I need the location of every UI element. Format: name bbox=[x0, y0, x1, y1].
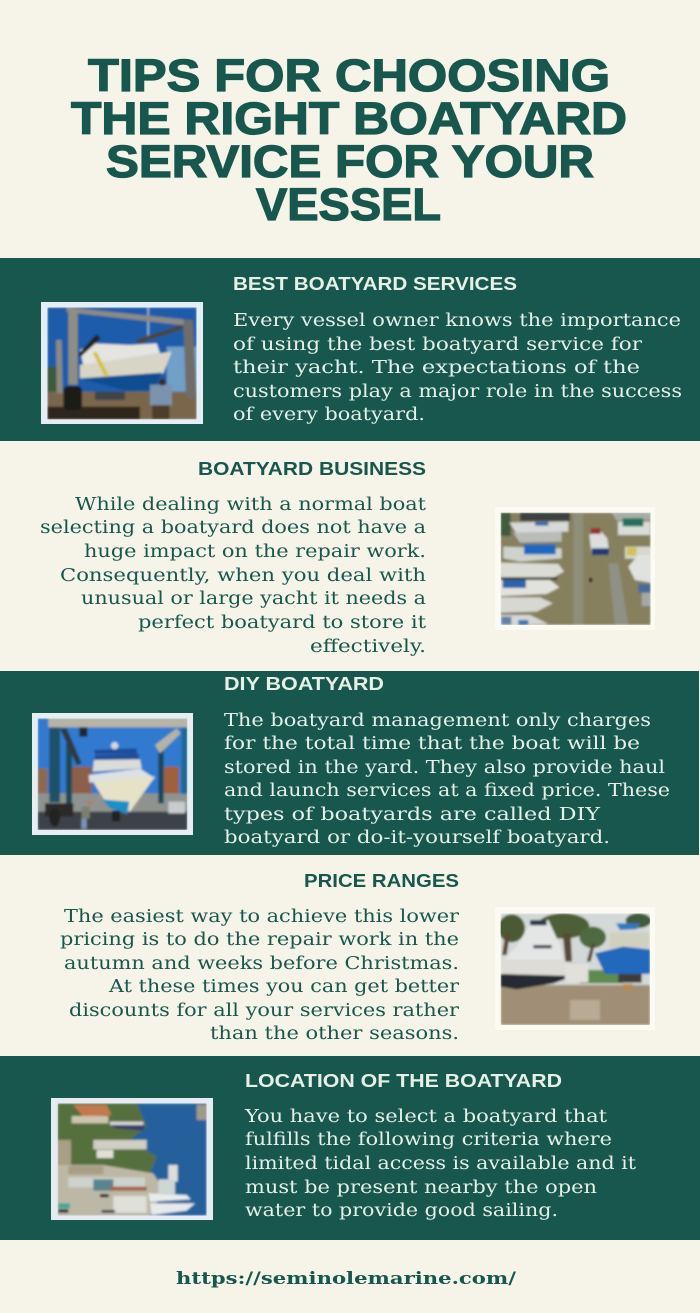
text block: The easiest way to achieve this lower bbox=[64, 907, 460, 927]
panel: DIY boatyard bbox=[0, 671, 699, 855]
text block: You have to select a boatyard that bbox=[244, 1107, 607, 1127]
panel: price ranges bbox=[60, 871, 655, 1044]
photo: boats on stands under palms bbox=[495, 907, 655, 1030]
text block: At these times you can get better bbox=[108, 977, 460, 997]
text block: Every vessel owner knows the importance bbox=[233, 311, 681, 331]
text block: boatyard or do-it-yourself boatyard. bbox=[224, 828, 610, 848]
text block: customers play a major role in the success bbox=[233, 382, 682, 402]
text block: stored in the yard. They also provide haul bbox=[224, 758, 665, 778]
text block: of using the best boatyard service for bbox=[233, 335, 643, 355]
text block: Consequently, when you deal with bbox=[60, 566, 426, 586]
heading: BOATYARD BUSINESS bbox=[198, 459, 426, 479]
text block: and launch services at a fixed price. These bbox=[224, 781, 670, 801]
title: VESSEL bbox=[256, 179, 441, 230]
text block bbox=[244, 1107, 636, 1221]
photo: boats parked in yard from above bbox=[495, 507, 655, 630]
text block: pricing is to do the repair work in the bbox=[60, 930, 459, 950]
text block: discounts for all your services rather bbox=[69, 1001, 460, 1021]
photo: motor yacht in travel lift bbox=[32, 713, 193, 835]
footer url: https://seminolemarine.com/ bbox=[176, 1269, 517, 1289]
title: THE RIGHT BOATYARD bbox=[71, 93, 627, 144]
heading: LOCATION OF THE BOATYARD bbox=[245, 1071, 562, 1091]
text block: must be present nearby the open bbox=[245, 1178, 597, 1198]
title: SERVICE FOR YOUR bbox=[106, 136, 594, 187]
photo: boat in travel lift bbox=[41, 302, 203, 424]
heading: PRICE RANGES bbox=[304, 871, 459, 891]
text block bbox=[60, 907, 460, 1044]
text block: types of boatyards are called DIY bbox=[224, 805, 601, 825]
text block: autumn and weeks before Christmas. bbox=[64, 954, 459, 974]
text block: fulfills the following criteria where bbox=[245, 1130, 612, 1150]
photo: aerial view of marina bbox=[51, 1098, 213, 1220]
heading: BEST BOATYARD SERVICES bbox=[233, 274, 517, 294]
text block: While dealing with a normal boat bbox=[75, 495, 426, 515]
text block bbox=[233, 311, 682, 425]
panel: best boatyard services bbox=[0, 258, 700, 441]
heading: DIY BOATYARD bbox=[224, 674, 384, 694]
text block: than the other seasons. bbox=[210, 1024, 459, 1044]
text block: for the total time that the boat will be bbox=[224, 734, 640, 754]
panel: boatyard business bbox=[40, 459, 655, 657]
text block: selecting a boatyard does not have a bbox=[40, 518, 426, 538]
text block: their yacht. The expectations of the bbox=[233, 358, 640, 378]
text block: perfect boatyard to store it bbox=[138, 613, 426, 633]
title: TIPS FOR CHOOSING bbox=[88, 50, 610, 101]
text block: effectively. bbox=[310, 637, 426, 657]
text block bbox=[40, 495, 426, 657]
text block bbox=[224, 711, 670, 848]
text block: The boatyard management only charges bbox=[224, 711, 651, 731]
title bbox=[71, 50, 627, 230]
text block: of every boatyard. bbox=[233, 405, 425, 425]
text block: huge impact on the repair work. bbox=[84, 542, 426, 562]
text block: water to provide good sailing. bbox=[245, 1201, 558, 1221]
panel: location of the boatyard bbox=[0, 1056, 700, 1240]
text block: unusual or large yacht it needs a bbox=[81, 589, 426, 609]
text block: limited tidal access is available and it bbox=[245, 1154, 636, 1174]
